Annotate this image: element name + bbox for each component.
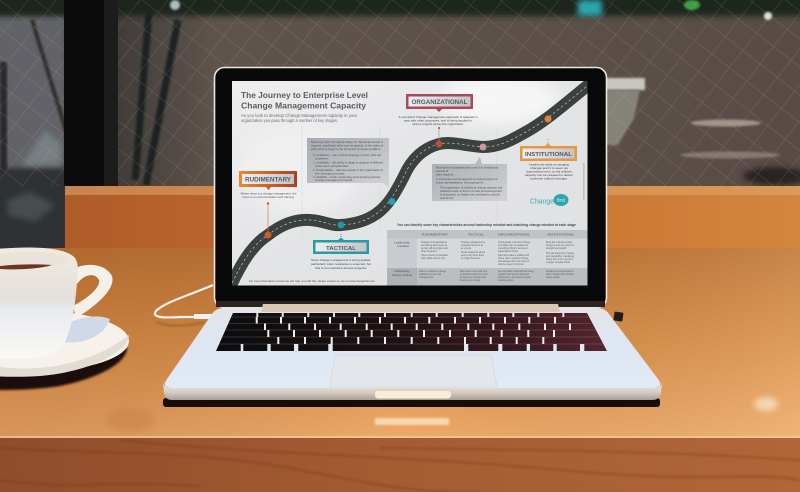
callout: moving from rudimentary to tactical: change management results. — [315, 178, 353, 182]
table: characteristics at each stage: change mindset — [392, 273, 412, 277]
laptop: display lid — [214, 68, 606, 308]
callout: moving from rudimentary to tactical — [307, 138, 389, 188]
text: organizational description: various projects across the organization. — [412, 122, 464, 126]
title: Change Management Capacity — [241, 100, 366, 110]
table: characteristics at each stage: Leadership — [394, 240, 410, 244]
table: characteristics at each stage: May have been part of a — [460, 270, 488, 273]
stage badge: institutional — [520, 144, 577, 161]
footer note: For more information on how we can help you with this, please contact us. Go to www.changefirst.com — [249, 279, 376, 283]
table: characteristics at each stage: management — [419, 276, 433, 279]
table: characteristics at each stage: something critical to success in — [498, 247, 529, 250]
table: characteristics at each stage — [387, 230, 588, 286]
table: characteristics at each stage: There is focus on immediate — [421, 254, 449, 257]
table: characteristics at each stage: ORGANIZATIONAL — [498, 232, 530, 236]
callout: moving to institutional level: to employees, so leaders are motivated for specific — [440, 192, 501, 196]
callout: moving to institutional level — [432, 157, 507, 201]
table: characteristics at each stage: Getting people to commit to change — [498, 241, 530, 244]
table: characteristics at each stage: and visible effects only — [421, 257, 446, 260]
table: characteristics at each stage: is broadly seen by leaders as — [498, 244, 529, 247]
stage badge: rudimentary: RUDIMENTARY — [245, 178, 291, 184]
logo: Changefirst: first — [557, 198, 566, 204]
text: tactical description: this is inconsistent across projects. — [315, 266, 367, 270]
subtitle — [241, 113, 358, 123]
callout: moving from rudimentary to tactical: toolset. — [315, 156, 329, 160]
text: institutional description: business critical changes. — [530, 176, 568, 180]
callout: moving from rudimentary to tactical: sizes and complexities. — [315, 164, 349, 168]
stage badge: tactical — [313, 238, 369, 254]
callout: moving to institutional level: outcomes. — [440, 196, 454, 200]
callout: moving from rudimentary to tactical: Moving from Rudimentary to Tactical Level 1 — [311, 140, 384, 144]
text: tactical description: particularly when resistance is expected, but — [311, 262, 371, 266]
callout: moving to institutional level: future generations. Strong buy-in. — [436, 180, 484, 184]
table: characteristics at each stage: Senior leadership attend — [461, 251, 486, 254]
table: characteristics at each stage: as being very separate from — [460, 276, 486, 279]
title — [241, 92, 368, 110]
stage badge: tactical: TACTICAL — [326, 246, 356, 252]
table: characteristics at each stage: able to handle more complex — [546, 273, 575, 276]
stage badge: institutional: INSTITUTIONAL — [525, 152, 572, 158]
callout: moving to institutional level: Level 4 — [436, 169, 449, 173]
marker: institutional stop — [544, 116, 552, 146]
callout: moving from rudimentary to tactical: requires: significant effort and recognition of the value of — [311, 144, 383, 148]
laptop: keyboard — [216, 313, 607, 352]
table: characteristics at each stage: performance, and need to explore — [498, 276, 532, 279]
text: organizational description: step with other processes, and is being applied to — [404, 118, 472, 122]
table: characteristics at each stage: RUDIMENTARY — [422, 232, 448, 236]
callout: moving from rudimentary to tactical: early wins to begin to be accepted by these enablers: — [311, 147, 381, 151]
table: characteristics at each stage: Change management is — [461, 241, 486, 244]
marker: rudimentary stop — [264, 202, 272, 238]
table: characteristics at each stage: mindset — [397, 244, 409, 248]
table: characteristics at each stage: Being able to handle constant — [546, 241, 572, 244]
stage badge: organizational: ORGANIZATIONAL — [412, 100, 468, 106]
subtitle: As you look to develop Change Management capacity in your — [241, 113, 358, 118]
table: characteristics at each stage: Change not recognized as — [421, 241, 448, 244]
table: characteristics at each stage: Sponsors take a visible and — [498, 254, 530, 257]
table: characteristics at each stage: be led; left to project and — [421, 247, 449, 250]
table: characteristics at each stage: possible options — [498, 279, 515, 282]
stage badge: organizational — [406, 94, 473, 112]
table: characteristics at each stage: change and it is seen as part of — [546, 258, 573, 261]
text: institutional description: organizational norm, so that sufficient — [526, 170, 572, 174]
text: institutional description: capacity can be released to deliver — [525, 173, 573, 177]
stage badge: rudimentary — [239, 171, 297, 190]
table: characteristics at each stage: Resilience the organization is — [546, 270, 575, 273]
wooden table top — [0, 248, 800, 438]
marker: tactical stops — [338, 198, 396, 239]
table: characteristics at each stage: line teams — [421, 250, 438, 253]
title: The Journey to Enterprise Level — [241, 90, 368, 100]
text: organizational description: A consistent change management approach is adopted in — [398, 115, 478, 119]
table: characteristics at each stage: recognized but seen as — [461, 244, 484, 247]
text: tactical description — [311, 259, 371, 270]
background: window with mesh — [0, 0, 800, 252]
text: rudimentary description: focus is on communication and training. — [242, 195, 295, 199]
callout: moving from rudimentary to tactical: 1. Consistency – use a common language, process, skills and — [313, 153, 381, 157]
trackpad — [330, 355, 497, 387]
icon: coffee cup and saucer — [0, 248, 129, 390]
text: institutional description: Leaders are adept at managing — [529, 162, 569, 166]
callout: moving to institutional level: often requires: — [436, 172, 454, 176]
table: characteristics at each stage: change is seen as a source of — [546, 244, 574, 247]
table: characteristics at each stage: Line and leaders understand that change — [498, 270, 534, 273]
table: characteristics at each stage: events only when there — [461, 254, 485, 257]
text: organizational description — [398, 116, 478, 126]
table: characteristics at each stage: successful project but is seen — [460, 273, 489, 276]
table: characteristics at each stage: Matching — [394, 269, 410, 273]
subtitle: organization you pass through a number of key stages. — [241, 118, 338, 123]
table: characteristics at each stage: what they expect in this phase — [498, 263, 524, 266]
text: institutional description — [525, 162, 573, 180]
text: rudimentary description: Where there is a change management, the — [240, 192, 297, 196]
callout: moving to institutional level: The organization is building its change capacity and — [440, 186, 502, 190]
text: rudimentary description — [240, 192, 296, 198]
callout: moving to institutional level: Moving from Organizational Level 3 to Institutional — [436, 166, 498, 170]
table: characteristics at each stage: strength and growth — [546, 247, 567, 250]
laptop: base and keyboard deck — [163, 304, 662, 400]
icon: charging cable — [155, 285, 216, 326]
callout: moving to institutional level: resilience levels, so there is a more personal approach — [440, 189, 502, 193]
table: characteristics at each stage: change agendas — [546, 276, 561, 279]
table: characteristics at each stage: active role in guiding change, — [498, 257, 529, 260]
logo: Changefirst — [530, 194, 568, 206]
road — [228, 82, 592, 292]
marker: organizational stops — [436, 127, 486, 150]
table heading: You can identify some key characteristics around leadership mindset and matching change mindset at each stage — [397, 223, 576, 227]
text: institutional description: change and it is seen as — [530, 166, 569, 170]
callout: moving from rudimentary to tactical: the change process. — [315, 172, 345, 176]
table: characteristics at each stage: INSTITUTIONAL — [548, 232, 575, 236]
table: characteristics at each stage: manager everyday activity — [546, 261, 571, 264]
logo: Changefirst: Change — [530, 198, 554, 206]
table: characteristics at each stage: and capability, managing — [546, 255, 575, 258]
table: characteristics at each stage: a cost — [461, 247, 471, 250]
vertical side note — [584, 163, 585, 200]
table: characteristics at each stage: is a high risk issue — [461, 257, 481, 260]
infographic on the screen — [228, 75, 592, 292]
table: characteristics at each stage: initiatives by line and — [419, 273, 442, 276]
usb dongle — [613, 311, 624, 322]
table: characteristics at each stage: Little or no belief in change — [419, 270, 447, 273]
callout: moving from rudimentary to tactical: 3. Sustainability – train key people in the organization to — [313, 168, 384, 172]
callout: moving from rudimentary to tactical: 2. Scalability – the ability to adapt to projects of different — [313, 160, 383, 164]
wooden ledge behind the laptop — [65, 186, 800, 248]
laptop shadow — [163, 398, 660, 407]
callout: moving from rudimentary to tactical: 4. Visibility – track measuring and reporting activity, — [313, 175, 381, 179]
table: characteristics at each stage: TACTICAL — [468, 232, 484, 236]
table: characteristics at each stage: impacts them and the business — [498, 273, 530, 276]
text: tactical description: Some change management is being applied, — [311, 258, 371, 262]
callout: moving to institutional level: A consistently executed approach to existing programs for — [436, 177, 498, 181]
wooden table front edge — [0, 438, 800, 492]
table: characteristics at each stage: organizational change — [498, 250, 518, 253]
table: characteristics at each stage: Personal investment in capacity — [546, 252, 575, 255]
table: characteristics at each stage: acknowledges value they bring and — [498, 260, 529, 263]
table: characteristics at each stage: business as usual — [460, 279, 480, 282]
table: characteristics at each stage: something that needs to — [421, 244, 448, 247]
stage divider lines — [302, 127, 497, 236]
